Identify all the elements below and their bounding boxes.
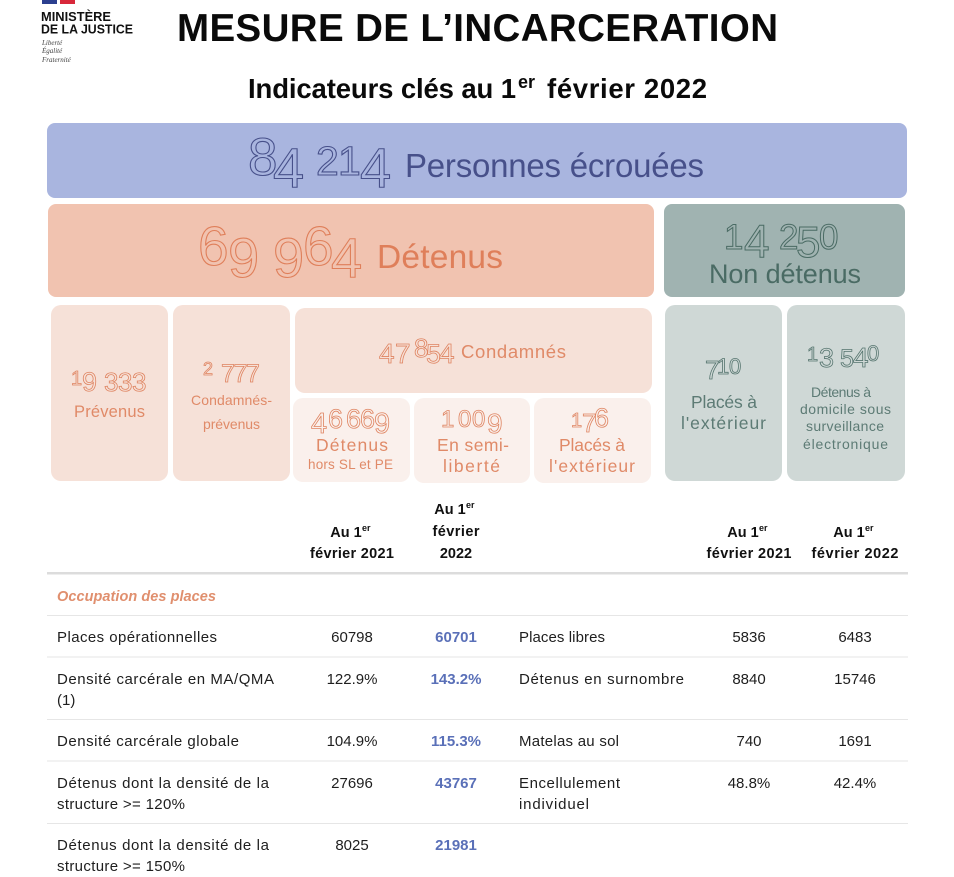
card: condamnés: 7 [395, 338, 411, 369]
card: détenus hors SL et PE: 6 [360, 404, 375, 434]
card: condamnés-prévenus: Condamnés- [191, 392, 272, 408]
row: places opérationnelles: 6483 [838, 629, 872, 646]
card: condamnés-prévenus [173, 305, 290, 481]
row: places opérationnelles: 60798 [331, 629, 373, 646]
card: prévenus: Prévenus [74, 403, 145, 421]
panel: détenus: 9 [228, 226, 259, 289]
card: détenus à domicile sous surveillance électronique: 5 [840, 345, 854, 373]
table header: er [466, 500, 475, 510]
table header: février 2021 [706, 546, 792, 562]
card: condamnés: 8 [414, 333, 428, 363]
card: prévenus: 3 [132, 367, 146, 397]
row: densité carcérale globale: 104.9% [327, 733, 377, 750]
row: densité >= 120%: 42.4% [834, 775, 876, 792]
card: condamnés: 5 [426, 339, 441, 369]
row: densité >= 120%: 27696 [331, 775, 373, 792]
table header [310, 500, 898, 562]
row: densité carcérale globale: 740 [736, 733, 762, 750]
card: placés à l'extérieur (condamnés): 7 [582, 408, 596, 438]
card: détenus hors SL et PE: hors SL et PE [308, 457, 393, 472]
panel: personnes écrouées: Personnes écrouées [405, 147, 704, 184]
row: densité >= 120%: structure >= 120% [57, 796, 185, 813]
table header: février 2021 [310, 546, 394, 562]
panel: personnes écrouées [47, 123, 907, 199]
card: détenus à domicile sous surveillance électronique: 1 [807, 344, 818, 366]
panel: non détenus: 5 [796, 218, 820, 267]
card: détenus à domicile sous surveillance électronique: Détenus à [811, 384, 871, 400]
card: détenus à domicile sous surveillance électronique: 0 [867, 341, 879, 366]
card: détenus à domicile sous surveillance électronique: surveillance [806, 418, 884, 434]
panel: détenus: 6 [198, 215, 229, 277]
table header: février 2022 [812, 546, 898, 562]
row: densité >= 150%: Détenus dont la densité de la [57, 837, 270, 854]
row: densité >= 150%: structure >= 150% [57, 858, 185, 875]
card: détenus hors SL et PE: Détenus [316, 435, 388, 455]
row: densité carcérale en MA/QMA: (1) [57, 692, 75, 709]
row: densité carcérale globale: 1691 [838, 733, 872, 750]
panel: personnes écrouées: 2 [316, 138, 339, 184]
panel: personnes écrouées: 4 [360, 136, 391, 199]
row: densité >= 150%: 8025 [335, 837, 369, 854]
card: condamnés [295, 308, 652, 393]
card: prévenus: 3 [104, 367, 118, 397]
card: détenus à domicile sous surveillance électronique: domicile sous [800, 401, 891, 417]
card: prévenus: 9 [82, 367, 97, 397]
row: densité >= 150%: 21981 [435, 837, 477, 854]
row: places opérationnelles: Places libres [519, 629, 605, 646]
card: prévenus: 3 [118, 367, 132, 397]
row: densité carcérale en MA/QMA: 15746 [834, 671, 876, 688]
table header: er [362, 523, 371, 533]
card: en semi-liberté: 9 [487, 408, 503, 439]
card: détenus à domicile sous surveillance électronique: électronique [803, 436, 888, 452]
row: densité carcérale en MA/QMA: 122.9% [327, 671, 377, 688]
row: densité >= 120%: Encellulement [519, 775, 621, 792]
row: densité carcérale globale: 115.3% [431, 733, 481, 750]
card: détenus à domicile sous surveillance électronique [787, 305, 905, 481]
row: densité carcérale en MA/QMA [57, 671, 876, 709]
table header: Au 1 [330, 525, 362, 541]
panel: non détenus: 2 [779, 218, 798, 257]
panel: non détenus: 1 [724, 218, 743, 257]
table header: er [865, 523, 874, 533]
panel: non détenus: 0 [819, 218, 838, 257]
card: prévenus [51, 305, 168, 481]
card: prévenus: 1 [71, 368, 82, 390]
subtitle: février 2022 [547, 73, 707, 104]
card: condamnés-prévenus: 7 [221, 360, 235, 388]
card: détenus hors SL et PE: 9 [374, 408, 390, 440]
row: densité carcérale globale: Densité carcérale globale [57, 733, 239, 750]
panel: non détenus: 4 [744, 215, 770, 267]
row: densité >= 120%: 48.8% [728, 775, 770, 792]
row: densité >= 120%: individuel [519, 796, 589, 813]
card: placés à l'extérieur (non détenus) [665, 305, 782, 481]
card: détenus hors SL et PE [293, 398, 410, 482]
row: densité carcérale en MA/QMA: 143.2% [431, 671, 481, 688]
panel: détenus [48, 204, 654, 297]
logo: ministère de la justice: Égalité [41, 47, 63, 55]
card: en semi-liberté: En semi- [437, 435, 509, 455]
card: détenus à domicile sous surveillance électronique: 3 [819, 343, 834, 373]
logo: ministère de la justice: DE LA JUSTICE [41, 22, 133, 36]
card: condamnés: 4 [379, 338, 395, 369]
card: détenus hors SL et PE: 6 [346, 404, 361, 434]
subtitle: Indicateurs clés au 1 [248, 73, 516, 104]
row: densité >= 120% [57, 775, 876, 813]
logo: ministère de la justice: MINISTÈRE [41, 9, 111, 24]
card: placés à l'extérieur (condamnés) [534, 398, 651, 483]
panel: détenus: Détenus [377, 239, 503, 276]
card: condamnés: Condamnés [461, 341, 566, 362]
card: en semi-liberté [414, 398, 530, 483]
row: densité carcérale en MA/QMA: Détenus en surnombre [519, 671, 684, 688]
card: condamnés: 4 [439, 338, 455, 369]
row: densité carcérale globale: Matelas au sol [519, 733, 619, 750]
table: occupation des places [47, 500, 908, 875]
row: places opérationnelles: Places opérationnelles [57, 629, 217, 646]
logo: ministère de la justice: Fraternité [41, 56, 72, 64]
panel: détenus: 4 [331, 226, 362, 289]
panel: personnes écrouées: 8 [248, 128, 277, 187]
panel: détenus: 6 [303, 215, 334, 277]
card: détenus hors SL et PE: 4 [311, 408, 327, 440]
row: densité >= 150% [57, 837, 477, 875]
table header: Au 1 [434, 502, 466, 518]
card: en semi-liberté: 0 [472, 406, 485, 433]
panel: personnes écrouées: 4 [273, 136, 304, 199]
panel: personnes écrouées: 1 [338, 138, 361, 184]
row: densité >= 120%: Détenus dont la densité de la [57, 775, 270, 792]
card: placés à l'extérieur (non détenus): l'extérieur [681, 413, 766, 433]
row: densité >= 120%: 43767 [435, 775, 477, 792]
table header: Au 1 [833, 525, 865, 541]
panel: non détenus [664, 204, 905, 297]
card: en semi-liberté: liberté [443, 456, 500, 476]
card: en semi-liberté: 0 [458, 406, 471, 433]
card: détenus à domicile sous surveillance électronique: 4 [853, 342, 869, 373]
title: MESURE DE L’INCARCERATION [177, 7, 778, 50]
card: placés à l'extérieur (non détenus): Placés à [691, 392, 757, 412]
panel: non détenus: Non détenus [709, 259, 861, 289]
table header: 2022 [440, 546, 472, 562]
table header: er [759, 523, 768, 533]
row: densité carcérale globale [57, 733, 872, 750]
card: placés à l'extérieur (condamnés): 1 [571, 410, 582, 432]
table header: Au 1 [727, 525, 759, 541]
card: condamnés-prévenus: 2 [203, 359, 213, 379]
card: placés à l'extérieur (condamnés): l'extérieur [549, 456, 635, 476]
card: condamnés-prévenus: 7 [246, 360, 260, 388]
panel: détenus: 9 [273, 226, 304, 289]
logo: ministère de la justice [41, 0, 133, 64]
row: densité carcérale en MA/QMA: Densité carcérale en MA/QMA [57, 671, 274, 688]
row: places opérationnelles: 5836 [732, 629, 766, 646]
card: placés à l'extérieur (condamnés): Placés à [559, 435, 625, 455]
card: placés à l'extérieur (non détenus): 7 [705, 355, 719, 385]
row: places opérationnelles: 60701 [435, 629, 477, 646]
section heading: Occupation des places [57, 589, 216, 605]
logo: ministère de la justice: Liberté [41, 39, 63, 47]
card: placés à l'extérieur (non détenus): 1 [717, 354, 729, 379]
card: en semi-liberté: 1 [441, 406, 454, 433]
card: condamnés-prévenus: 7 [234, 360, 247, 388]
table header: février [432, 524, 480, 540]
card: condamnés-prévenus: prévenus [203, 416, 260, 432]
subtitle [248, 72, 707, 104]
card: placés à l'extérieur (condamnés): 6 [594, 403, 609, 433]
card: détenus hors SL et PE: 6 [328, 404, 343, 434]
row: places opérationnelles [57, 629, 872, 646]
subtitle: er [518, 72, 535, 92]
card: placés à l'extérieur (non détenus): 0 [729, 354, 741, 379]
row: densité carcérale en MA/QMA: 8840 [732, 671, 766, 688]
